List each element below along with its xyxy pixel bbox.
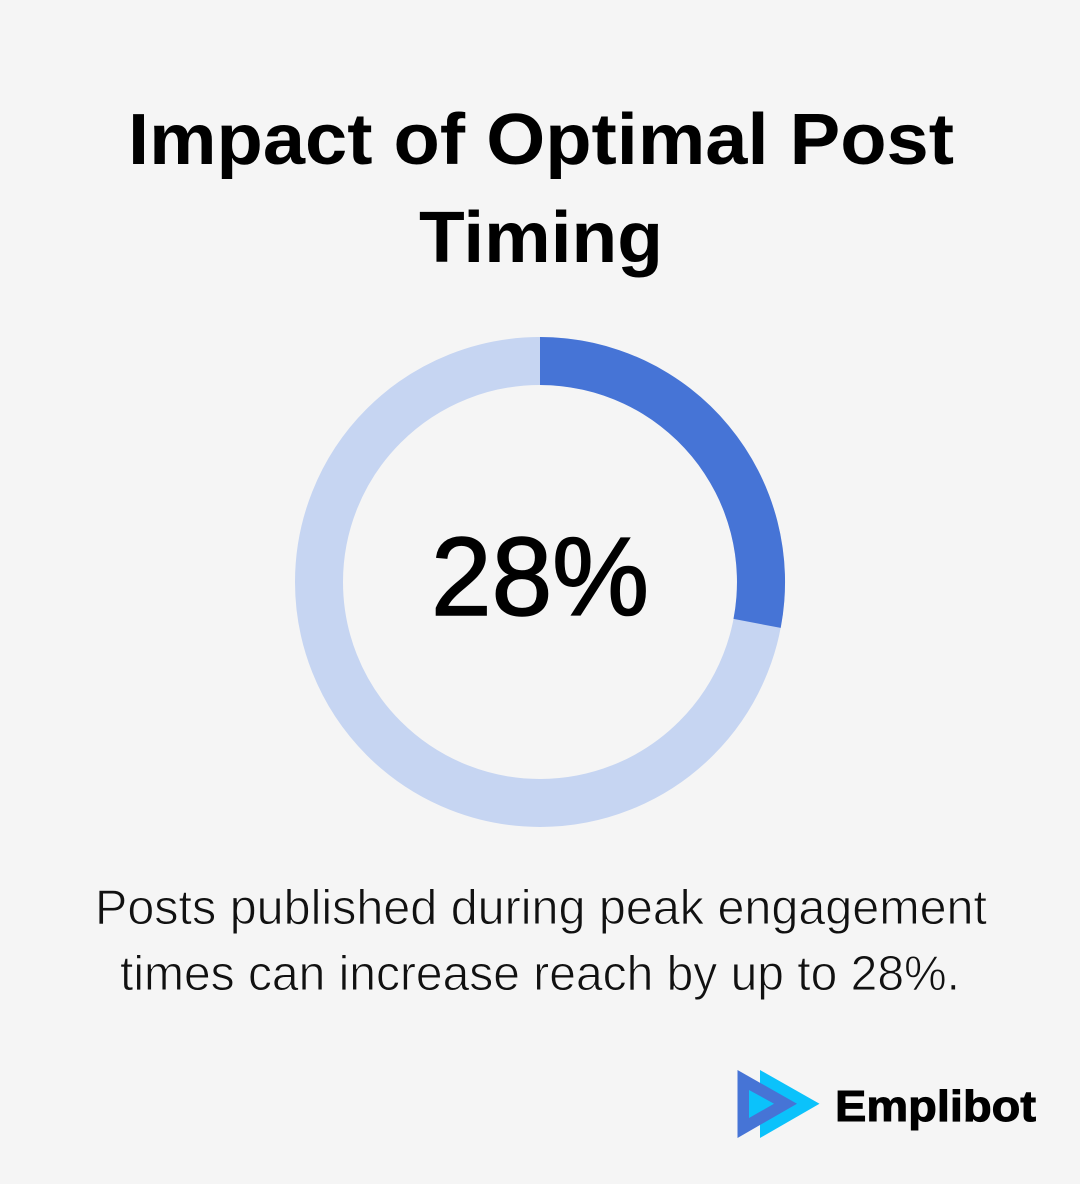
donut value: 28%: [431, 515, 649, 639]
description text: [95, 881, 987, 1001]
icon: play triangles: [738, 1070, 820, 1138]
logo wordmark: Emplibot: [835, 1082, 1036, 1131]
description text: Posts published during peak engagement: [95, 881, 987, 935]
title: Timing: [419, 198, 663, 278]
logo: Emplibot: [738, 1070, 1036, 1138]
title: Impact of Optimal Post: [128, 100, 954, 180]
donut chart: 28%: [319, 337, 785, 803]
description text: times can increase reach by up to 28%.: [120, 947, 960, 1001]
title: [128, 100, 954, 278]
